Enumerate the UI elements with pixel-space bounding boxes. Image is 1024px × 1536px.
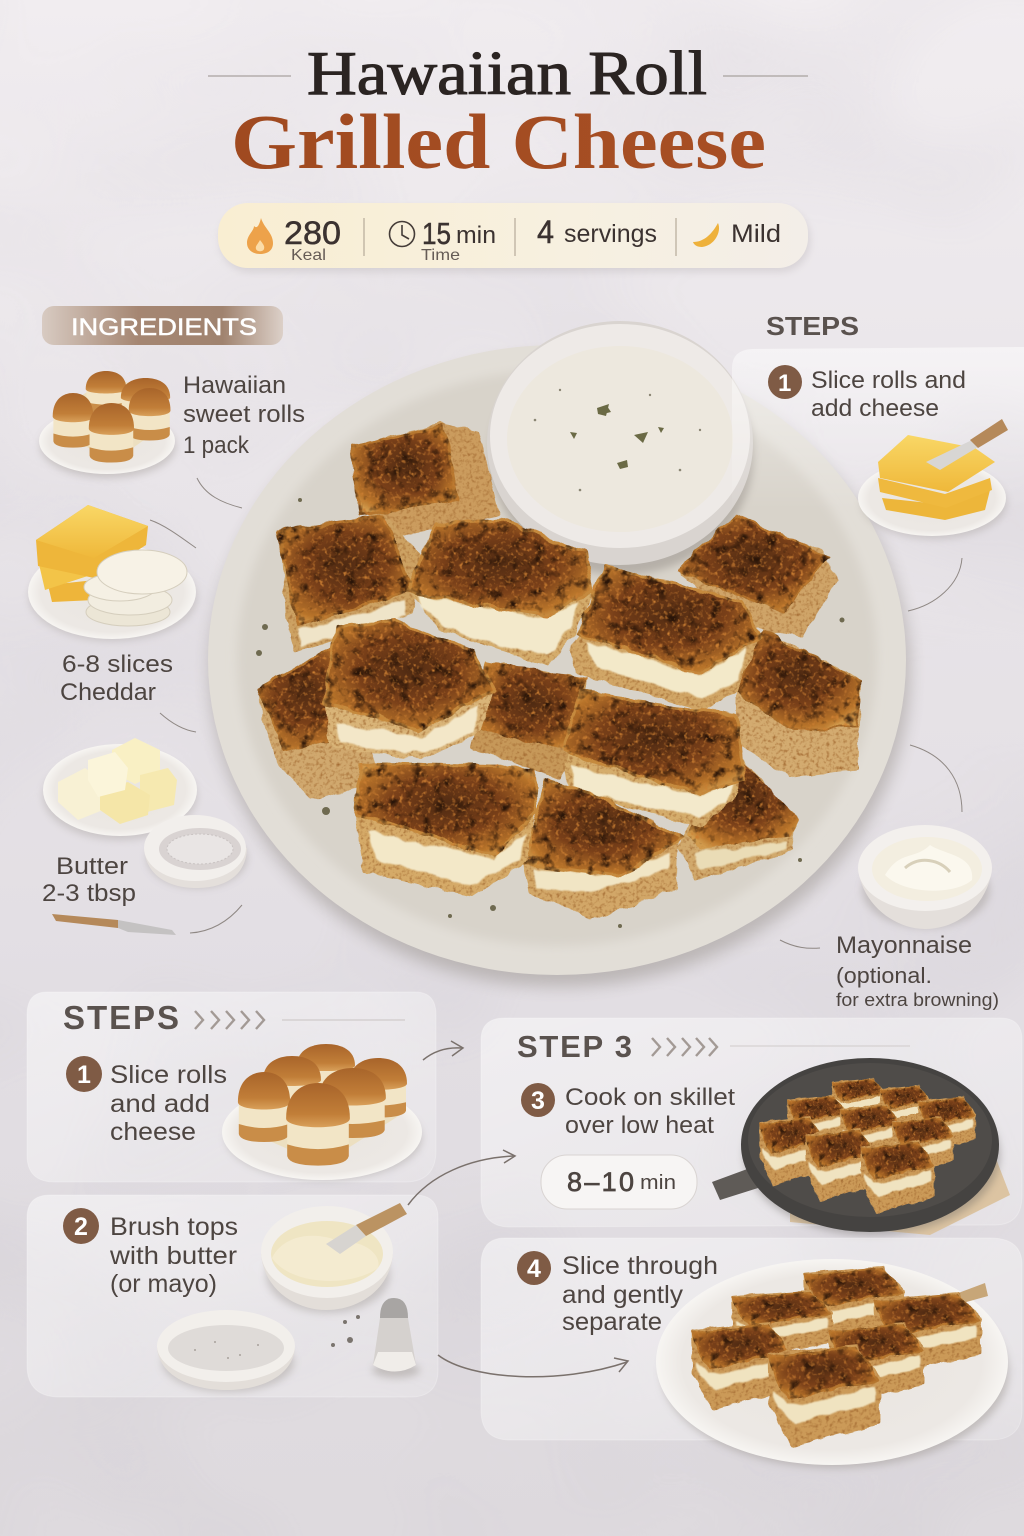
- roll: center: [407, 520, 592, 664]
- stats pill: Keal: [291, 247, 326, 264]
- dipping sauce bowl: [487, 321, 754, 575]
- panel: ingredients: [28, 306, 999, 1010]
- step number 1: [66, 1056, 102, 1092]
- step text: Slice rolls: [110, 1061, 227, 1089]
- callout leader lines: [150, 478, 962, 948]
- cheese plate image with knife: [858, 419, 1008, 539]
- panel: step 3: [481, 1018, 1022, 1235]
- heading: steps: [63, 999, 405, 1036]
- step number 2: [63, 1208, 99, 1244]
- step text: add cheese: [811, 395, 939, 422]
- ingredient label: cheddar: [60, 651, 173, 706]
- title: [208, 40, 808, 185]
- title: Grilled Cheese: [231, 98, 766, 185]
- step text: with butter: [109, 1242, 237, 1270]
- step text: Slice rolls and: [811, 367, 966, 394]
- arrow: step 2 to step 3: [408, 1150, 515, 1205]
- small flour bowl: [157, 1310, 295, 1392]
- roll: front center: [524, 781, 682, 918]
- roll: center right: [570, 566, 761, 710]
- ingredient label: Hawaiian sweet rolls: [183, 372, 305, 459]
- roll: right lower: [680, 751, 799, 880]
- step text: Cook on skillet: [565, 1084, 735, 1111]
- ingredient label: cheddar: Cheddar: [60, 679, 156, 706]
- stats pill: Time: [421, 247, 460, 264]
- ingredient label: mayonnaise: [836, 932, 999, 1010]
- time pill: min: [640, 1172, 676, 1194]
- ingredient label: mayonnaise: for extra browning): [836, 990, 999, 1010]
- ingredient label: butter: Butter: [56, 853, 128, 880]
- heading: step 3: [517, 1029, 910, 1064]
- step number 4: [517, 1251, 551, 1285]
- step number 3: 3: [531, 1087, 545, 1115]
- icon: clock: [390, 222, 414, 246]
- panel: top right steps: [732, 311, 1024, 539]
- ingredient: cheddar and cheese slices image: [28, 505, 197, 641]
- ingredient label: Hawaiian sweet rolls: 1 pack: [183, 432, 250, 459]
- step number 1: 1: [77, 1061, 91, 1089]
- ingredients badge: [42, 306, 283, 345]
- ingredient label: mayonnaise: Mayonnaise: [836, 932, 972, 959]
- ingredient label: butter: [42, 853, 136, 907]
- skillet with rolls: [712, 1058, 1010, 1235]
- final plate with rolls: [656, 1259, 1009, 1468]
- arrow: step 2 to step 4: [438, 1355, 628, 1377]
- ingredient: butter image: [43, 738, 197, 840]
- stats pill: Mild: [731, 220, 781, 248]
- panel: step 4: [481, 1238, 1022, 1468]
- stats pill: 15: [422, 216, 451, 251]
- stats pill: [218, 203, 810, 272]
- icon: butter knife: [52, 914, 176, 935]
- ingredient: salt bowl: [144, 815, 247, 888]
- roll: right: [734, 631, 861, 776]
- rolls on plate: [222, 1044, 422, 1180]
- step text: [110, 1061, 227, 1146]
- grilled rolls pile: [258, 425, 861, 918]
- time pill: 8–10: [567, 1167, 634, 1197]
- ingredient label: cheddar: 6-8 slices: [62, 651, 173, 678]
- step number 1: 1: [778, 370, 791, 397]
- stats pill: min: [456, 222, 496, 249]
- step text: [811, 367, 966, 422]
- roll: front left: [324, 620, 494, 758]
- step number 2: 2: [74, 1213, 88, 1241]
- step text: over low heat: [565, 1112, 714, 1139]
- ingredient: mayonnaise bowl: [858, 825, 992, 929]
- panel: steps 1: [27, 992, 436, 1182]
- heading: step 3: STEP 3: [517, 1029, 632, 1064]
- step text: Slice through: [562, 1252, 718, 1280]
- ingredient: Hawaiian rolls image: [39, 371, 176, 478]
- step text: [565, 1084, 735, 1139]
- step text: Brush tops: [110, 1213, 238, 1241]
- step number 4: 4: [527, 1255, 541, 1283]
- stats pill: 4: [537, 214, 554, 250]
- step text: [562, 1252, 718, 1336]
- roll: front: [356, 764, 536, 895]
- salt shaker: [372, 1298, 420, 1378]
- roll: far left: [258, 644, 378, 798]
- step text: [109, 1213, 238, 1298]
- step number 1: [768, 365, 802, 399]
- step text: cheese: [110, 1118, 196, 1146]
- roll: left: [278, 516, 423, 650]
- butter bowl with brush: [261, 1203, 407, 1313]
- title: Hawaiian Roll: [307, 40, 707, 108]
- roll: center under: [472, 662, 588, 778]
- roll: center lower: [564, 692, 744, 825]
- ingredient label: Hawaiian sweet rolls: Hawaiian: [183, 372, 286, 399]
- icon: flame: [247, 218, 273, 254]
- step text: and add: [110, 1090, 210, 1118]
- ingredients badge: INGREDIENTS: [71, 314, 257, 341]
- ingredient label: butter: 2-3 tbsp: [42, 880, 136, 907]
- stats pill: 280: [284, 215, 341, 251]
- main plate: [208, 345, 910, 987]
- step number 3: [521, 1083, 555, 1117]
- step text: and gently: [562, 1281, 684, 1309]
- time pill: [541, 1155, 697, 1209]
- ingredient label: mayonnaise: (optional.: [836, 963, 932, 988]
- step text: separate: [562, 1308, 662, 1336]
- step text: (or mayo): [110, 1270, 217, 1298]
- arrow: step 1 to step 3: [423, 1041, 463, 1060]
- stats pill: servings: [564, 220, 657, 248]
- panel: top right steps: STEPS: [766, 311, 859, 341]
- icon: mild pepper: [693, 223, 719, 247]
- panel: step 2: [27, 1195, 438, 1397]
- heading: steps: STEPS: [63, 999, 179, 1036]
- roll: top right: [678, 516, 835, 635]
- ingredient label: Hawaiian sweet rolls: sweet rolls: [183, 401, 305, 428]
- roll: back top: [353, 425, 497, 533]
